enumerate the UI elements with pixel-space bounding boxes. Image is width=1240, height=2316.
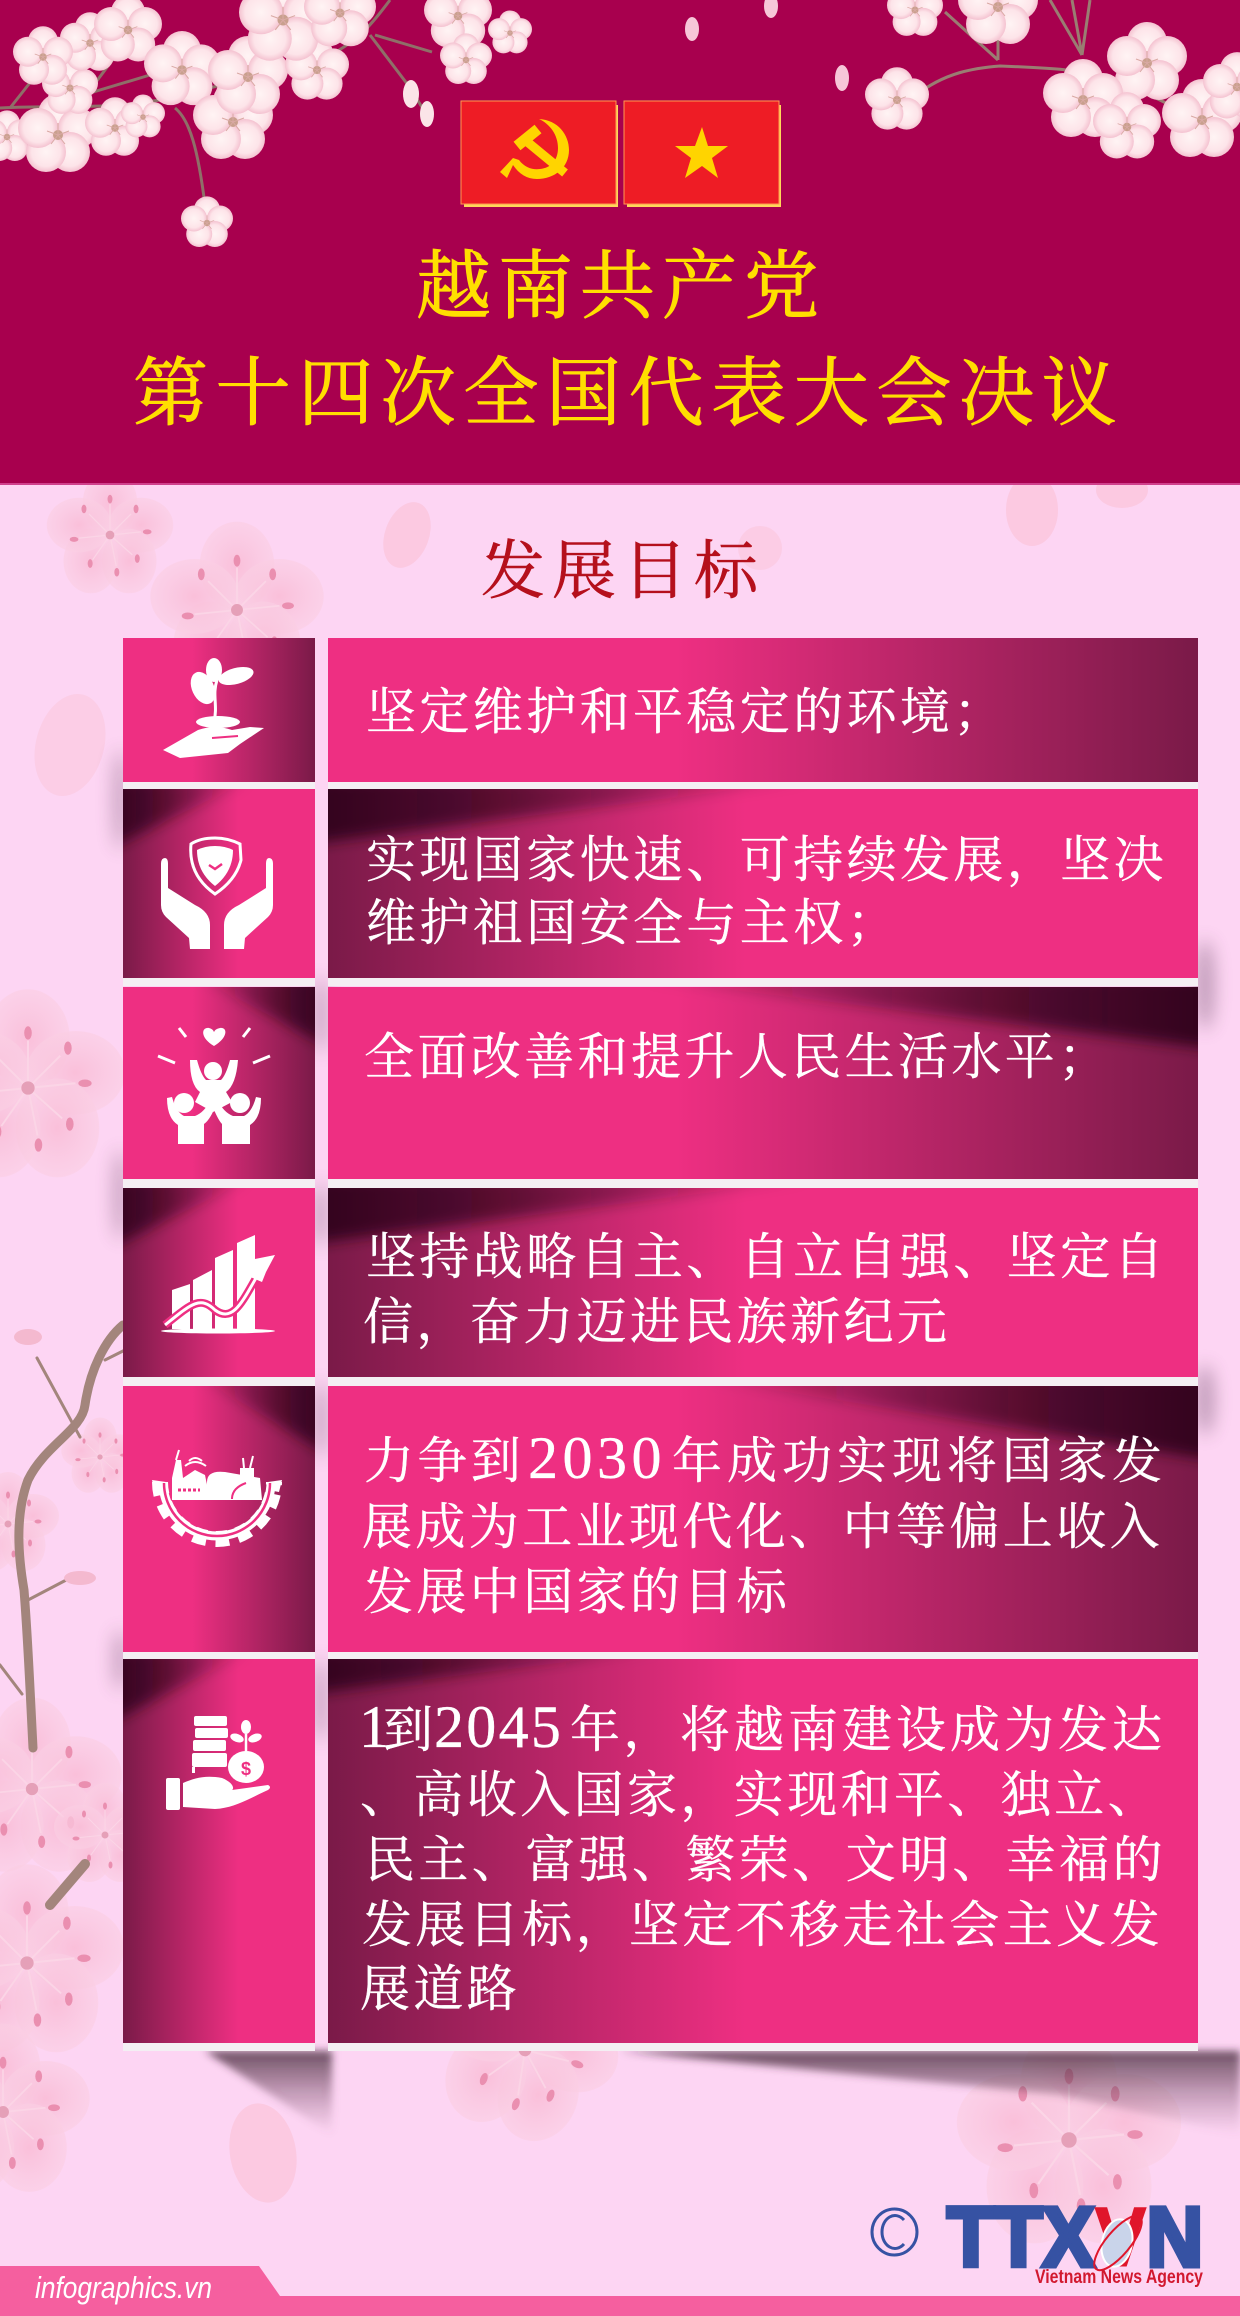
row 6 text panel	[300, 1648, 1198, 2043]
icon: hand with coins and money bag	[166, 1716, 270, 1810]
row 6 text: 将越南建设成为发达	[680, 1702, 1166, 1758]
row 6 text: 展道路	[360, 1961, 520, 2017]
row 4 text	[363, 1229, 1167, 1350]
icon: industry in gear	[152, 1450, 282, 1539]
title	[133, 246, 1124, 436]
vietnam flag	[624, 101, 781, 207]
row 4 text: 信，奋力迈进民族新纪元	[363, 1294, 950, 1350]
row 6 icon panel	[123, 1659, 315, 2043]
row 2 text: 维护祖国安全与主权；	[366, 895, 900, 951]
top left cherry branch	[0, 0, 849, 247]
row 5 text: 2030	[528, 1425, 666, 1491]
title: 越南共产党	[416, 246, 826, 329]
row 5 text: 年成功实现将国家发	[672, 1433, 1167, 1489]
icon: hands holding shield	[161, 838, 273, 949]
row 6	[105, 1648, 1198, 2051]
row 4 text panel	[300, 1177, 1198, 1377]
row 5	[123, 1375, 1225, 1659]
icon: happy people	[158, 1028, 270, 1144]
row 1 text panel	[328, 638, 1198, 782]
row 5 text: 发展中国家的目标	[363, 1564, 790, 1620]
row 6 text: 到	[383, 1702, 436, 1758]
title: 第十四次全国代表大会决议	[133, 353, 1124, 436]
row 5 text: 展成为工业现代化、中等偏上收入	[362, 1499, 1163, 1555]
row 4 text: 坚持战略自主、自立自强、坚定自	[366, 1229, 1167, 1285]
logo: TTXVN: TTXVN	[947, 2190, 1203, 2284]
row 4	[105, 1177, 1198, 1386]
row 6 text	[359, 1694, 1166, 2017]
header band	[0, 0, 1240, 485]
footer site name: infographics.vn	[35, 2270, 212, 2305]
icon: plant in hand	[163, 658, 264, 758]
heading: development goals: 发展目标	[481, 536, 765, 607]
party flag	[461, 101, 618, 207]
row 6 text: 年，	[570, 1702, 677, 1758]
row 2 text	[366, 832, 1167, 951]
row 5 text panel	[328, 1375, 1225, 1652]
bottom shadows under last row	[205, 2051, 1240, 2135]
row 6 text: 、高收入国家，实现和平、独立、	[360, 1767, 1161, 1823]
row 2 icon panel	[123, 789, 315, 978]
row 1 icon panel	[123, 638, 315, 782]
row 5 text: 力争到	[364, 1433, 524, 1489]
row 5 text	[362, 1425, 1167, 1620]
row 2 text: 实现国家快速、可持续发展，坚决	[366, 832, 1167, 888]
soft drop shadows around panels	[114, 750, 1214, 1742]
row 6 text: 民主、富强、繁荣、文明、幸福的	[365, 1832, 1166, 1888]
icon: hand with coins and money bag: $	[241, 1759, 251, 1779]
row 3 icon panel	[123, 987, 315, 1179]
copyright symbol	[872, 2209, 917, 2255]
row 3 text: 全面改善和提升人民生活水平；	[364, 1029, 1112, 1085]
background cherry blossoms	[0, 471, 1181, 2243]
row 6 text: 发展目标，坚定不移走社会主义发	[362, 1897, 1163, 1953]
row 3	[123, 976, 1225, 1188]
icon: rising chart	[161, 1235, 275, 1334]
footer band and tab	[0, 2266, 1240, 2316]
logo: TTXVN: Vietnam News Agency	[1035, 2267, 1203, 2288]
row 1 text: 坚定维护和平稳定的环境；	[366, 684, 1007, 740]
row 6 text: 2045	[434, 1694, 563, 1760]
top right cherry branch	[865, 0, 1240, 158]
row 2	[105, 778, 1198, 986]
row 2 text panel	[300, 778, 1198, 978]
row 4 icon panel	[123, 1188, 315, 1377]
flags	[461, 101, 781, 207]
row 3 text panel	[328, 976, 1225, 1179]
row 1	[123, 638, 1198, 789]
row 6 text: 1	[359, 1694, 392, 1760]
left cherry branch	[0, 1325, 125, 1905]
row 5 icon panel	[123, 1386, 315, 1652]
